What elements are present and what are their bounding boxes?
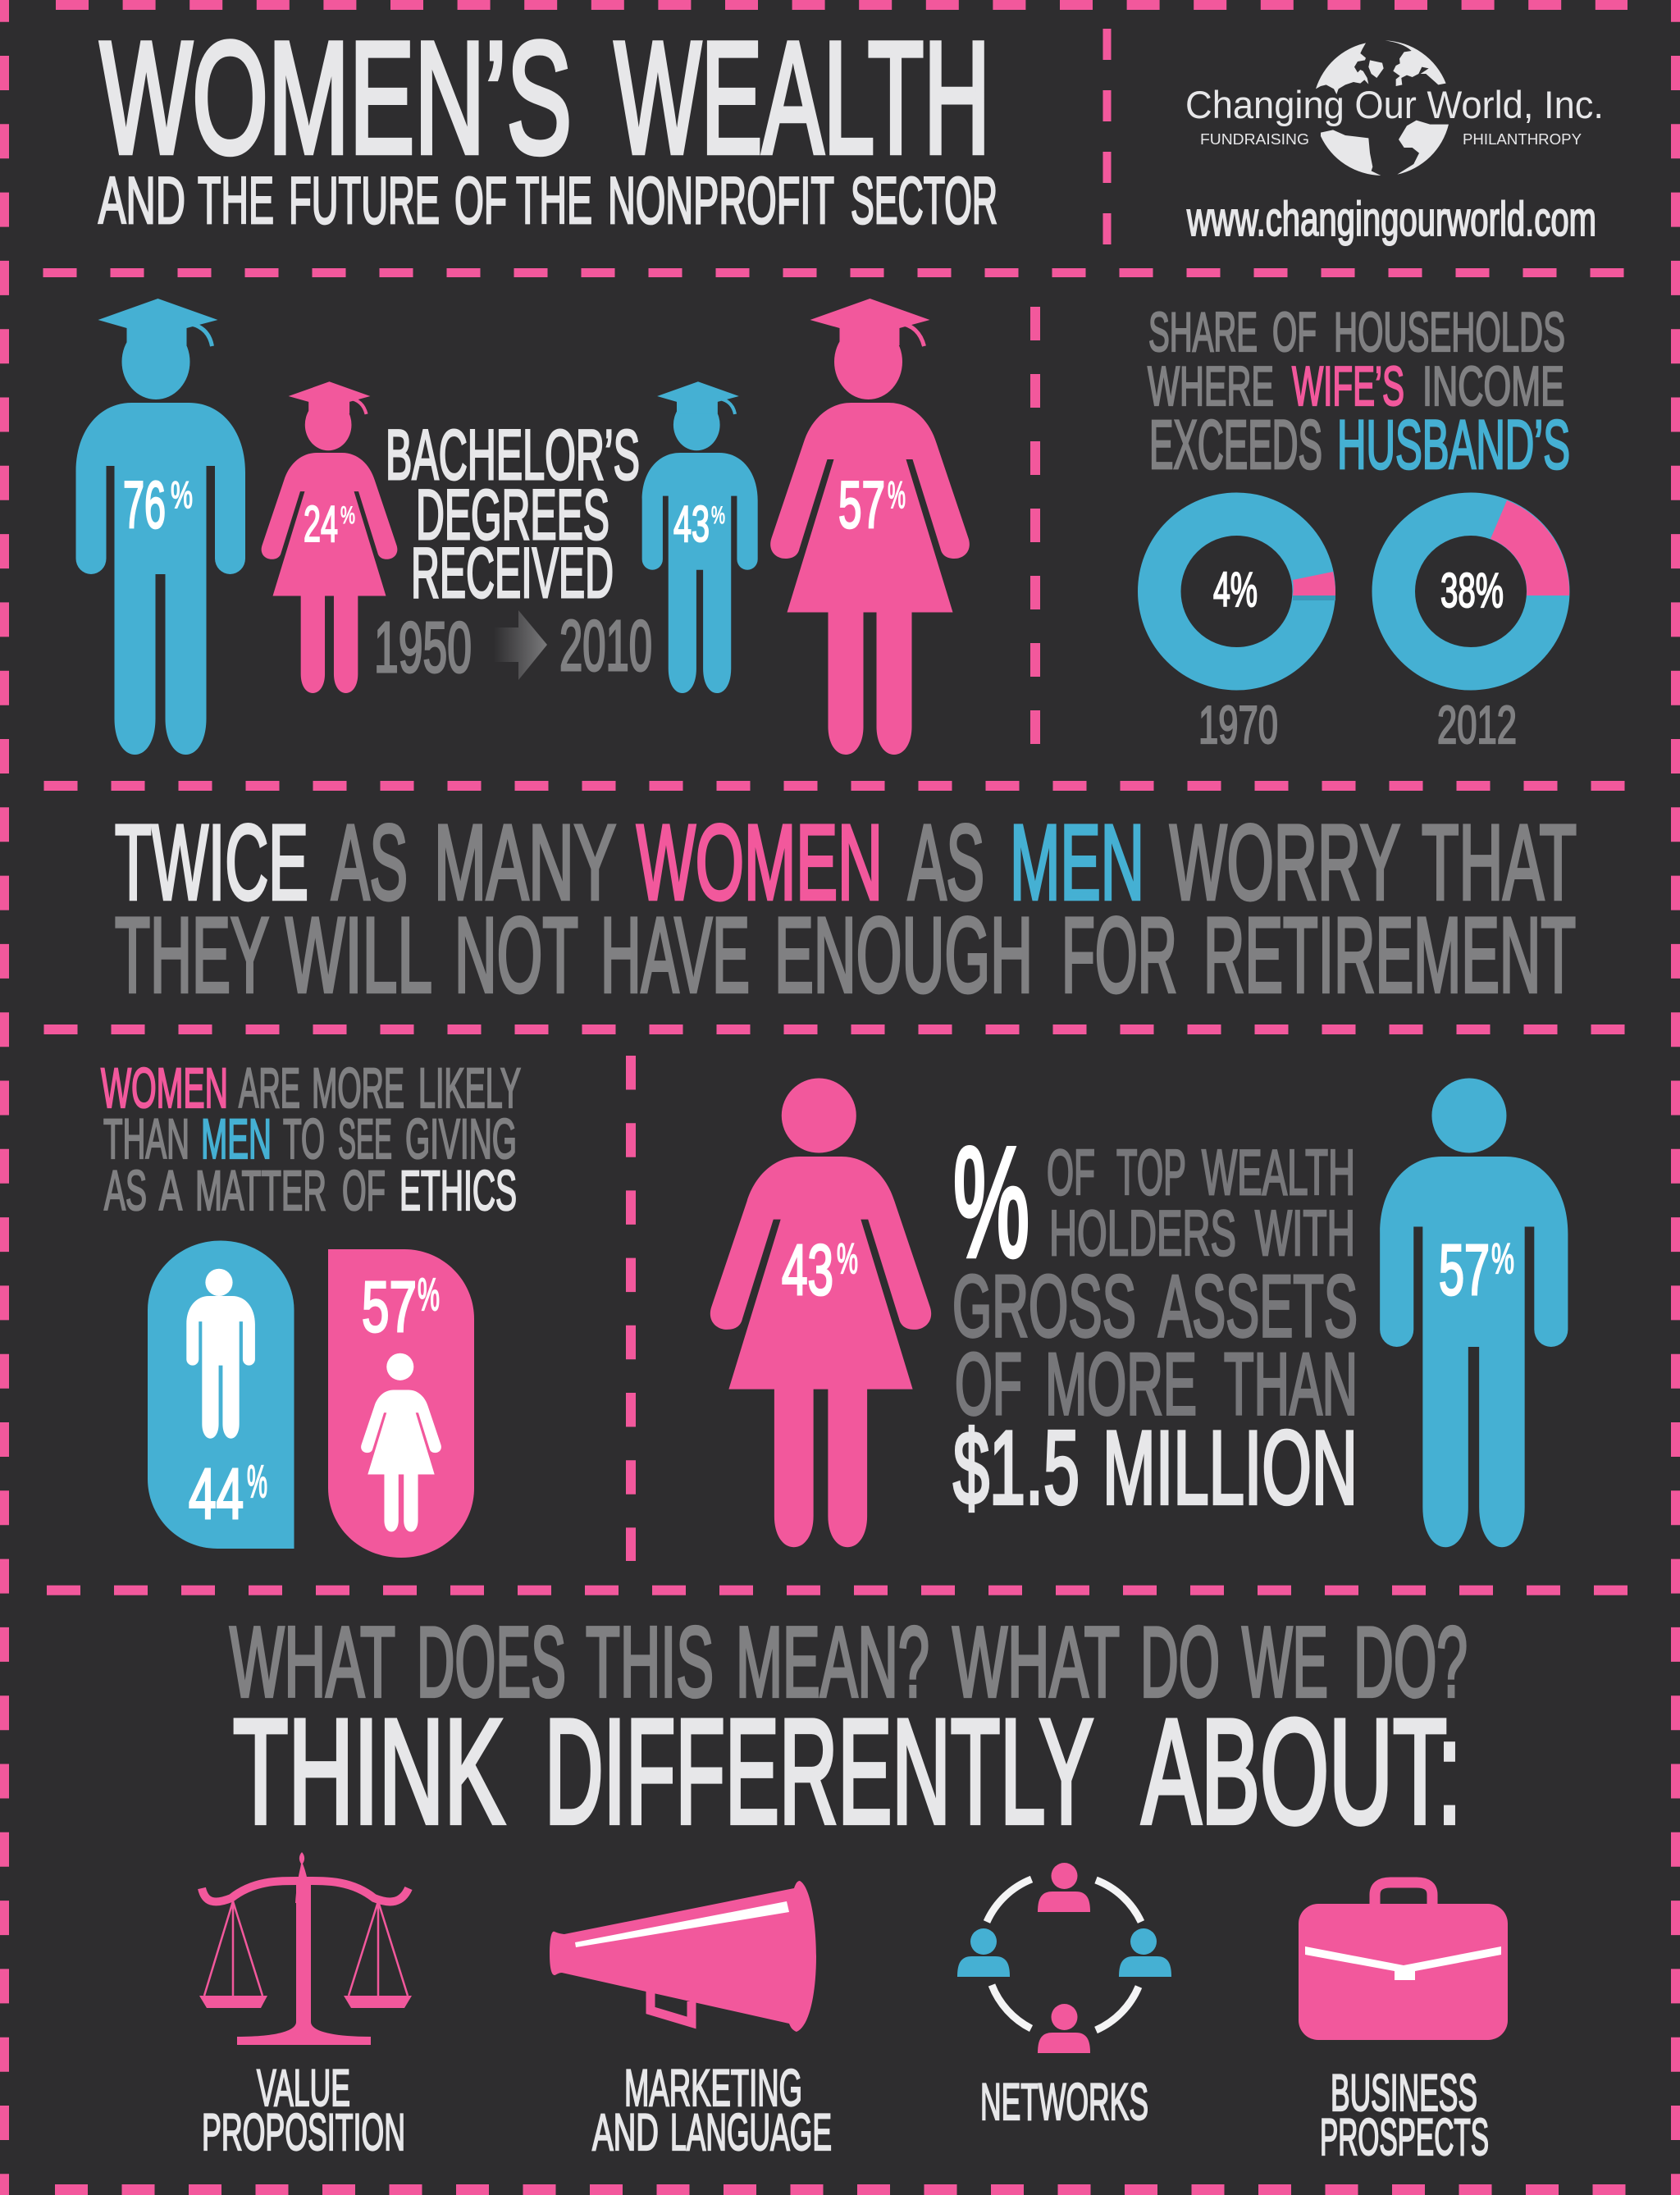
panel: bachelor's degrees [75,299,970,755]
stat: 76%: % [171,473,193,516]
heading: share of households: OF [1272,301,1317,363]
text block: top wealth holders: MILLION [1102,1409,1358,1526]
item: networks [957,1863,1171,2131]
question heading: MEAN? [736,1606,929,1718]
headline: twice as many women: ENOUGH [774,895,1033,1015]
logo: Changing Our World: PHILANTHROPY [1463,131,1582,148]
headline: twice as many women: HAVE [600,895,750,1015]
item: business prospects [1299,1882,1508,2166]
question heading: DO? [1354,1606,1468,1718]
stat: 43%: % [711,502,725,529]
stat: 57%: 57 [1439,1230,1490,1310]
label: 2012: 2012 [1437,695,1517,755]
main heading: think differently about [233,1689,1462,1855]
headline: twice as many women: TWICE [115,802,308,922]
headline: twice as many women: WILL [285,895,432,1015]
stat: 57%: 57 [838,468,885,542]
donut chart: 2012: 38% [1440,564,1504,618]
heading: bachelor's degrees received: RECEIVED [411,534,614,613]
label: networks: NETWORKS [980,2074,1148,2131]
heading: women more likely: ETHICS [399,1159,517,1222]
figure: man 1950 with cap [75,299,245,755]
label: value proposition: PROPOSITION [202,2104,405,2161]
heading: women more likely: ARE [239,1056,300,1120]
title [98,9,998,238]
icon: scales [199,1852,412,2045]
question heading: DO [1140,1606,1220,1718]
text block: top wealth holders: ASSETS [1158,1257,1358,1355]
big percent sign: % [953,1116,1029,1289]
logo: Changing Our World [1185,40,1604,176]
label: business prospects: PROSPECTS [1320,2109,1489,2166]
figure: man 57% [1380,1079,1568,1547]
headline: twice as many women: NOT [454,895,578,1015]
label: value proposition: VALUE [257,2060,350,2117]
heading: women more likely: MORE [312,1056,404,1120]
stat: 76%: 76 [123,468,166,542]
title: THE [198,164,274,238]
main heading: think differently about: ABOUT: [1142,1689,1462,1855]
logo: Changing Our World: Changing Our World, Inc. [1185,83,1604,126]
title: WEALTH [614,9,990,187]
figure: woman 2010 with cap [770,299,970,755]
card: women 57%: % [418,1268,440,1320]
card: men 44%: 44 [189,1454,244,1534]
heading: women more likely: OF [342,1159,386,1222]
heading: share of households: EXCEEDS [1149,406,1322,483]
card: men 44% [148,1240,294,1549]
stat: 43%: 43 [782,1230,833,1310]
icon: globe [1316,40,1449,176]
stat: 43%: % [837,1235,858,1283]
text block: top wealth holders: MORE [1045,1335,1197,1433]
icon: white man [186,1269,255,1439]
card: women 57% [328,1249,474,1558]
text block: top wealth holders: THAN [1224,1335,1358,1433]
item: value proposition [199,1852,412,2161]
figure: man 2010 with cap [642,381,758,693]
question heading: WE [1242,1606,1328,1718]
question heading: WHAT [230,1606,395,1718]
headline: twice as many women: THEY [115,895,269,1015]
stat: 57%: % [888,473,906,516]
icon: network of people [957,1863,1171,2053]
stat: 24%: % [340,502,355,529]
headline: twice as many women: FOR [1061,895,1177,1015]
heading: women more likely: THAN [103,1107,189,1171]
text block: top wealth holders: TOP [1116,1136,1186,1208]
heading: women more likely: GIVING [405,1107,517,1171]
label: marketing and language: MARKETING [624,2060,802,2117]
logo: Changing Our World: FUNDRAISING [1200,131,1309,148]
heading: share of households: WIFE’S [1292,355,1404,418]
label: 2010: 2010 [559,606,652,686]
text block: top wealth holders: OF [955,1335,1022,1433]
heading: bachelor's degrees received [386,416,640,613]
title: SECTOR [851,164,998,238]
main heading: think differently about: THINK [233,1689,504,1855]
stat: 24%: 24 [304,496,338,553]
question heading: DOES [417,1606,566,1718]
icon: megaphone [550,1881,816,2032]
card: women 57%: 57 [362,1267,417,1347]
arrow: 1950 to 2010 [494,610,547,680]
label: business prospects: BUSINESS [1331,2065,1477,2122]
item: marketing and language [550,1881,832,2161]
heading: women more likely: MEN [201,1107,272,1171]
label: marketing and language: AND [592,2104,659,2161]
panel: household income share [1148,301,1570,755]
question heading: WHAT [952,1606,1120,1718]
title: OF [454,164,507,238]
label: marketing and language [592,2060,832,2161]
heading: women more likely: AS [104,1159,147,1222]
donut chart: 1970 [1159,514,1335,669]
title: AND [98,164,185,238]
heading: share of households: SHARE [1148,301,1258,363]
title: WOMEN’S [100,9,572,187]
text block: top wealth holders: GROSS [952,1257,1136,1355]
heading: share of households: INCOME [1422,355,1564,418]
text block: top wealth holders: $1.5 [953,1409,1080,1526]
question heading: THIS [586,1606,714,1718]
label: marketing and language: LANGUAGE [670,2104,832,2161]
stat: 43%: 43 [673,496,710,553]
text block: top wealth holders: OF [1047,1136,1095,1208]
card: men 44%: % [247,1455,267,1507]
heading: women more likely: MATTER [195,1159,326,1222]
headline: twice as many women: AS [331,802,408,922]
panel: giving as ethics [101,1056,521,1558]
figure: woman 43% [710,1079,931,1547]
stat: 57%: % [1491,1235,1514,1283]
title: THE [516,164,592,238]
heading: women more likely: WOMEN [101,1056,228,1120]
panel: top wealth holders [710,1079,1568,1547]
main heading: think differently about: DIFFERENTLY [545,1689,1093,1855]
label: 1970: 1970 [1198,695,1278,755]
headline: twice as many women: WOMEN [637,802,883,922]
headline: twice as many women [115,802,1577,1015]
heading: women more likely: TO [283,1107,325,1171]
text block: top wealth holders: WITH [1255,1197,1355,1269]
heading: women more likely: LIKELY [418,1056,521,1120]
icon: briefcase [1299,1882,1508,2040]
label: value proposition [202,2060,405,2161]
headline: twice as many women: MANY [434,802,616,922]
headline: twice as many women: MEN [1010,802,1144,922]
heading: women more likely: SEE [338,1107,392,1171]
title: FUTURE [289,164,440,238]
label: 1950: 1950 [374,608,472,687]
heading: bachelor's degrees received: BACHELOR’S [386,416,640,495]
text block: top wealth holders [952,1136,1358,1526]
heading: women more likely: A [159,1159,182,1222]
heading: bachelor's degrees received: DEGREES [416,476,609,554]
donut chart: 1970: 4% [1213,563,1258,617]
text block: top wealth holders: WEALTH [1202,1136,1355,1208]
text block: top wealth holders: HOLDERS [1049,1197,1236,1269]
title: NONPROFIT [608,164,834,238]
heading: share of households: WHERE [1148,355,1274,418]
question heading [230,1606,1468,1718]
figure: woman 1950 with cap [262,381,397,693]
label: business prospects [1320,2065,1489,2166]
headline: twice as many women: WORRY [1170,802,1400,922]
headline: twice as many women: AS [908,802,984,922]
heading: share of households [1148,301,1570,483]
donut chart: 2012 [1394,500,1569,669]
icon: white woman [361,1353,441,1531]
heading: women more likely [101,1056,521,1222]
